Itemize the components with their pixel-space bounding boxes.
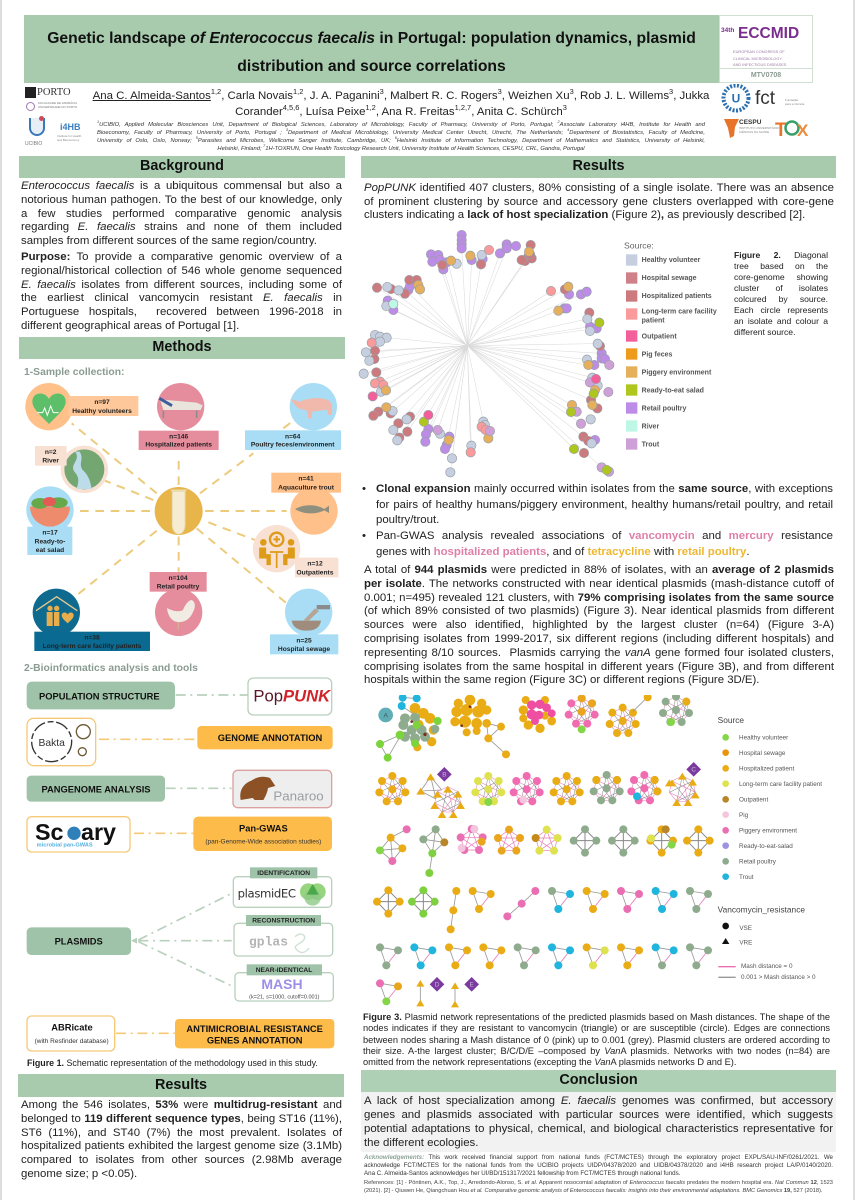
text: plasmids paragraph: 0.001; n=495) revealed 121 clusters, with 79% comprising isolates from the same source bbox=[364, 592, 834, 604]
tool: plasmidEC: IDENTIFICATION bbox=[257, 870, 310, 877]
text: results left: Among the 546 isolates, 53% were multidrug-resistant and bbox=[21, 1099, 342, 1111]
source: river: n=2 bbox=[45, 449, 57, 456]
legend: vancomycin resistance: Vancomycin_resistance bbox=[718, 904, 805, 914]
logo: U emblem: U bbox=[732, 92, 740, 106]
center: test tube bbox=[155, 487, 203, 535]
affiliations: University of Oslo, Oslo, Norway; 5Parasites and Microbes, Wellcome Sanger Institute, Cambridge, UK; 6Helsinki Institute of Information Technology, Department of Mathematics and Statistics, University of Helsinki, bbox=[97, 136, 705, 144]
source: healthy volunteers bbox=[25, 383, 138, 430]
title banner bbox=[24, 15, 719, 83]
legend: source colours: Pig bbox=[739, 812, 749, 819]
text: plasmids paragraph: comprising isolates from the same hospital in different years (Figure 3B), and from different bbox=[364, 661, 834, 673]
source: trout: n=41 bbox=[298, 475, 314, 482]
badges B C D E: D bbox=[435, 982, 440, 989]
logos left: UCIBIO bbox=[25, 141, 42, 147]
logos left: UNIVERSIDADE DO PORTO bbox=[38, 105, 77, 109]
tool: gplas bbox=[234, 915, 333, 956]
source: river: River bbox=[42, 458, 59, 465]
legend: source: Retail poultry bbox=[642, 405, 687, 412]
bullet: pan-GWAS: Pan-GWAS analysis revealed associations of vancomycin and mercury resistance bbox=[376, 530, 833, 542]
logo: CESPU: CIÊNCIAS DA SAÚDE bbox=[739, 129, 769, 134]
text: purpose: the earliest clinical vancomycin resistant E. faecalis in bbox=[21, 292, 342, 304]
text: background: notorious human pathogen. To the best of our knowledge, only bbox=[21, 194, 342, 206]
box: pangenome analysis: PANGENOME ANALYSIS bbox=[41, 784, 151, 794]
text: results left: ST6 (11%), and ST40 (7%) the most prevalent. Isolates of bbox=[21, 1126, 342, 1138]
source: river bbox=[35, 446, 108, 493]
badge A bbox=[378, 708, 393, 722]
bullet: clonal expansion: poultry/trout. bbox=[376, 514, 439, 526]
source: healthy volunteers: Healthy volunteers bbox=[72, 408, 132, 415]
text: purpose: regional/historical collection of 546 whole genome sequenced bbox=[21, 265, 342, 277]
conference logo: ECCMID: ECCMID bbox=[738, 25, 799, 42]
small clusters row 3 bbox=[376, 825, 714, 877]
tool: ABRicate bbox=[27, 1016, 115, 1051]
heading: Methods: Methods bbox=[152, 339, 212, 355]
caption: figure 3: between nodes sharing a Mash distance of 0 (pink) up to 0.001 (grey). Plasmid clusters are ordered according to bbox=[363, 1035, 830, 1045]
box: pan-GWAS: Pan-GWAS bbox=[239, 824, 288, 834]
logo: Scoary: microbial pan-GWAS bbox=[37, 843, 93, 849]
badges B C D E: C bbox=[691, 767, 696, 774]
tool: MASH: (k=21, s=1000, cutoff=0.001) bbox=[249, 994, 320, 1000]
legend: source colours: Healthy volunteer bbox=[739, 735, 788, 742]
authors bbox=[92, 87, 710, 118]
caption: figure 1: Figure 1. Schematic representation of the methodology used in this study. bbox=[27, 1058, 318, 1068]
text: background: regarding E. faecalis strains and none of them included bbox=[21, 221, 342, 233]
text: results left: belonged to 119 different sequence types, being ST16 (11%), bbox=[21, 1113, 342, 1125]
text: purpose: Purpose: To provide a comparative genomic overview of a bbox=[21, 251, 342, 263]
caption: figure 2: different source. bbox=[734, 327, 795, 337]
tool: MASH bbox=[235, 964, 333, 1001]
logo: Scoary: ary bbox=[81, 819, 116, 845]
text: plasmids paragraph: hospitals within the same region (Figure 3C) or different regions (Figure 3D/E). bbox=[364, 674, 759, 686]
cluster 3 bbox=[519, 696, 556, 733]
tool: gplas: RECONSTRUCTION bbox=[252, 918, 315, 925]
legend: source: Ready-to-eat salad bbox=[642, 387, 704, 394]
text: plasmids paragraph: representing 8/10 sources. Plasmids carrying the vanA gene formed four isolated clusters, bbox=[364, 647, 834, 659]
logos left: FACULDADE DE FARMÁCIA bbox=[38, 101, 77, 105]
legend: mash distance: Mash distance = 0 bbox=[741, 963, 793, 970]
source: pig bbox=[245, 383, 341, 450]
text: references bbox=[364, 1180, 833, 1194]
tree nodes bbox=[359, 230, 614, 477]
legend: vancomycin resistance: VRE bbox=[739, 939, 752, 946]
source: pig: n=64 bbox=[285, 433, 301, 440]
legend: source colours bbox=[718, 715, 822, 881]
subheading: sample collection: 1-Sample collection: bbox=[24, 367, 124, 378]
box: AMR annotation: GENES ANNOTATION bbox=[207, 1036, 303, 1046]
conference logo: ECCMID: CLINICAL MICROBIOLOGY bbox=[733, 56, 782, 61]
legend: source colours: Trout bbox=[739, 874, 754, 881]
text: results left bbox=[21, 1099, 342, 1180]
logo: Panaroo: Panaroo bbox=[273, 789, 324, 804]
logo: CESPU bbox=[724, 119, 780, 138]
legend: source colours: Hospitalized patient bbox=[739, 766, 794, 773]
legend: source: patient bbox=[642, 318, 665, 325]
page edge strip right bbox=[853, 0, 855, 1200]
legend: source: Outpatient bbox=[642, 333, 677, 340]
logo: Bakta bbox=[27, 718, 96, 766]
logo: TOX: T bbox=[775, 120, 787, 141]
tree branches bbox=[364, 248, 602, 472]
text: plasmids paragraph: (of which 89% consisted of two plasmids) (Figure 3). Near identical plasmids from different bbox=[364, 605, 834, 617]
text: plasmids paragraph: sources were also identified, highlighted by the largest cluster (n=64) (Figure 3-A) bbox=[364, 619, 834, 631]
source: trout: Aquaculture trout bbox=[278, 484, 335, 491]
text: purpose: different geographical areas of Portugal [1]. bbox=[21, 320, 239, 332]
box: plasmids bbox=[27, 927, 131, 955]
box: plasmids: PLASMIDS bbox=[55, 936, 103, 946]
text: acknowledgements: Ana C. Almeida-Santos acknowledges her UI/BD/151317/2021 fellowship from FCT/MCTES through national funds. bbox=[364, 1170, 680, 1177]
bullet: clonal expansion: for pairs of healthy humans/piggery environment, healthy humans/retail poultry, and retail bbox=[376, 499, 833, 511]
legend: source colours: Hospital sewage bbox=[739, 750, 786, 757]
text: conclusion: potential adaptations to physical, chemical, and biological characteristics representative for bbox=[364, 1123, 833, 1135]
heading: Background bbox=[19, 156, 345, 178]
logos left bbox=[25, 87, 82, 147]
source: hospital sewage: n=25 bbox=[296, 637, 312, 644]
legend: source colours: Long-term care facility patient bbox=[739, 781, 822, 788]
box: pan-GWAS bbox=[193, 817, 332, 851]
legend: source colours: Piggery environment bbox=[739, 828, 797, 835]
affiliations: Helsinki, Finland; 71H-TOXRUN, One Health Toxicology Research Unit, University Institute of Health Sciences, CESPU, CRL, Gandra, Portugal bbox=[217, 144, 585, 152]
heading: Conclusion: Conclusion bbox=[559, 1072, 638, 1088]
conference logo: ECCMID: EUROPEAN CONGRESS OF bbox=[733, 49, 785, 54]
legend: mash distance bbox=[718, 963, 816, 981]
legend: source colours: Source bbox=[718, 715, 744, 725]
box: genome annotation bbox=[197, 726, 333, 749]
logos left: Institute for Health bbox=[57, 134, 81, 138]
conclusion background panel bbox=[361, 1092, 836, 1152]
source: outpatients: Outpatients bbox=[297, 569, 334, 576]
affiliations bbox=[97, 120, 706, 152]
source: retail poultry bbox=[150, 572, 207, 636]
logo: PopPUNK: PopPUNK bbox=[253, 686, 332, 705]
legend: source colours: Outpatient bbox=[739, 797, 768, 804]
subheading: bioinformatics: 2-Bioinformatics analysis and tools bbox=[24, 663, 198, 674]
text: acknowledgements: acknowledge FCT/MCTES for the national funds from the UCIBIO projects UIDP/04378/2020 and UIDB/04378/2020 and i4HB research project LA/P/0140/2020. bbox=[364, 1162, 833, 1169]
heading: Results right: Results bbox=[572, 158, 624, 174]
title banner: distribution and source correlations bbox=[237, 58, 506, 75]
text: background: samples from different sources of the same region/country. bbox=[21, 235, 317, 247]
caption: figure 2: Figure 2. Diagonal bbox=[734, 250, 828, 260]
text: plasmids paragraph: per isolate. The networks constructed with near identical plasmids (mash-distance cutoff of bbox=[364, 578, 834, 590]
source: hospital sewage bbox=[270, 589, 338, 654]
logo: Panaroo bbox=[233, 770, 332, 808]
logo: TOX: X bbox=[797, 121, 809, 140]
caption: figure 3: omitted from the network representations (excepting the VanA plasmids networks D and E). bbox=[363, 1057, 736, 1067]
badges B C D E bbox=[430, 762, 701, 992]
affiliations: 1UCIBIO, Applied Molecular Biosciences Unit, Department of Biological Sciences, Laboratory of Microbiology, Faculty of Pharmacy, University of Porto, Portugal; 2Associate Laboratory i4HB, Institute for Health and bbox=[97, 120, 705, 128]
text: acknowledgements: Acknowledgements: This work received financial support from national funds (FCT/MCTES) through the exploratory project EXPL/SAU-INF/0261/2021. We bbox=[364, 1154, 833, 1161]
caption: figure 2: tree based on the bbox=[734, 261, 828, 271]
legend: source colours: Retail poultry bbox=[739, 859, 777, 866]
source: healthy volunteers: n=97 bbox=[94, 399, 110, 406]
heading: Methods bbox=[19, 337, 345, 359]
source: salad bbox=[26, 486, 74, 555]
text: conclusion: A lack of host specialization among E. faecalis genomes was confirmed, but accessory bbox=[364, 1095, 833, 1107]
bullet: pan-GWAS bbox=[362, 530, 833, 558]
source: hospitalized patients: n=146 bbox=[169, 434, 188, 441]
heading: Conclusion bbox=[361, 1070, 836, 1092]
source: pig: Poultry feces/environment bbox=[251, 442, 335, 449]
logos right bbox=[722, 84, 809, 141]
tool: plasmidEC bbox=[233, 867, 332, 907]
badge A: A bbox=[383, 713, 388, 720]
source: long-term care: Long-term care facility patients bbox=[43, 643, 142, 650]
small clusters row 5 bbox=[376, 943, 712, 969]
badges B C D E: B bbox=[442, 772, 446, 779]
legend: source: Healthy volunteer bbox=[642, 257, 701, 264]
box: AMR annotation bbox=[175, 1019, 334, 1048]
text: references: (2021). [2] - Qiuwen He, Qiangchuan Hou et al. Comparative genomic analysis of Enterococcus faecalis: insights into their environmental adaptations. BMC Genomics 19, 527 (2018). bbox=[364, 1188, 822, 1194]
affiliations: Bioeconomy, Faculty of Pharmacy, University of Porto, Portugal ; 3Department of Medical Microbiology, University Medical Center Utrecht, Utrecht, The Netherlands; 4Department of Biostatistics, Faculty of Medicine, bbox=[97, 128, 705, 136]
heading: Results left bbox=[18, 1074, 344, 1097]
caption: figure 3: their size. A-the largest cluster; B/C/D/E –composed by VanA plasmids. Networks with two nodes (n=84) are bbox=[363, 1046, 830, 1056]
source: retail poultry: n=104 bbox=[168, 575, 188, 582]
authors: Corander4,5,6, Luísa Peixe1,2, Ana R. Freitas1,2,7, Anita C. Schürch3 bbox=[235, 103, 567, 118]
logo: fct: Fundação bbox=[785, 98, 799, 102]
text: results intro: of prominent clustering by source and accessory gene clusters overlapped with core-gene bbox=[364, 196, 834, 208]
cluster 2 bbox=[450, 695, 510, 758]
text: results intro: clusters indicating a lack of host specialization (Figure 2), as previously described [2]. bbox=[364, 209, 805, 221]
logo: fct: fct bbox=[755, 88, 776, 109]
text: conclusion: the different ecologies. bbox=[364, 1137, 478, 1149]
text: background: a few studies performed comparative genomic analysis bbox=[21, 208, 342, 220]
tool: plasmidEC: plasmidEC bbox=[238, 886, 296, 900]
source: long-term care bbox=[33, 589, 150, 651]
legend: source: Trout bbox=[642, 441, 660, 448]
heading: Results left: Results bbox=[155, 1077, 207, 1093]
heading: Background: Background bbox=[140, 158, 224, 174]
ring clusters row 1 bbox=[565, 693, 693, 737]
bullet: clonal expansion: Clonal expansion mainly occurred within isolates from the same source, with exceptions bbox=[376, 483, 833, 495]
legend: source: Pig feces bbox=[642, 351, 673, 358]
tool: MASH: MASH bbox=[261, 976, 303, 992]
box: population structure: POPULATION STRUCTURE bbox=[39, 692, 160, 702]
text: references: References: [1] - Pöntinen, A.K., Top, J., Arredondo-Alonso, S. et al. Apparent nosocomial adaptation of Enterococcus faecalis predates the modern hospital era. Nat Commun 12, 1523 bbox=[364, 1180, 833, 1186]
text: conclusion bbox=[364, 1095, 833, 1149]
box: pan-GWAS: (pan-Genome-Wide association studies) bbox=[205, 838, 321, 845]
legend: vancomycin resistance bbox=[718, 904, 805, 946]
box: pangenome analysis bbox=[27, 776, 165, 802]
caption: figure 2: an isolate and colour a bbox=[734, 316, 828, 326]
text: results left: compared to isolates from other sources (2.98Mb average bbox=[21, 1154, 342, 1166]
small clusters row 6 bbox=[376, 979, 459, 1007]
text: background: Enterococcus faecalis is a ubiquitous commensal but also a bbox=[21, 180, 342, 192]
legend: source bbox=[624, 240, 717, 450]
text: purpose: Portuguese hospitals, recovered between 1996-2018 in bbox=[21, 306, 342, 318]
text: results intro bbox=[364, 182, 834, 221]
logo: Bakta: Bakta bbox=[38, 738, 65, 749]
logo: TOX bbox=[775, 120, 809, 141]
box: genome annotation: GENOME ANNOTATION bbox=[218, 733, 323, 743]
cluster A (largest) bbox=[376, 694, 442, 762]
conference logo: ECCMID bbox=[719, 15, 813, 83]
text: plasmids paragraph bbox=[364, 564, 834, 686]
badges B C D E: E bbox=[470, 982, 474, 989]
legend: source: Hospitalized patients bbox=[642, 293, 712, 300]
authors: Ana C. Almeida-Santos1,2, Carla Novais1,2, J. A. Paganini3, Malbert R. C. Rogers3, Weizhen Xu3, Rob J. L. Willems3, Jukka bbox=[93, 87, 709, 102]
page edge strip left bbox=[0, 0, 2, 1200]
ring clusters row 2 bbox=[375, 771, 700, 818]
text: background bbox=[21, 180, 342, 247]
source: hospitalized patients bbox=[139, 383, 219, 450]
tool: gplas: gplas bbox=[249, 935, 288, 950]
tool: ABRicate: ABRicate bbox=[51, 1023, 93, 1033]
text: results intro: PopPUNK identified 407 clusters, 80% consisting of a single isolate. There was an absence bbox=[364, 182, 834, 194]
box: population structure bbox=[27, 682, 175, 709]
logos left: PORTO bbox=[37, 87, 71, 98]
text: plasmids paragraph: A total of 944 plasmids were predicted in 88% of isolates, with an average of 2 plasmids bbox=[364, 564, 834, 576]
source: outpatients: n=12 bbox=[307, 561, 323, 568]
text: conclusion: genes and plasmids associated with particular sources were identified, which suggests bbox=[364, 1109, 833, 1121]
logo: Scoary: Sc bbox=[35, 819, 64, 845]
source: trout bbox=[271, 473, 341, 535]
legend: source: River bbox=[642, 423, 659, 430]
legend: source colours: Ready-to-eat-salad bbox=[739, 843, 793, 850]
logo: fct bbox=[755, 88, 805, 109]
figure 2: phylogenetic tree bbox=[358, 230, 717, 478]
caption: figure 2: Each circle represents bbox=[734, 305, 828, 315]
figure 1b: bioinformatics tools bbox=[24, 663, 334, 1052]
figure 3: plasmid networks bbox=[372, 695, 822, 1008]
arrowhead: plasmids bbox=[131, 938, 137, 944]
logo: Scoary bbox=[27, 817, 130, 852]
caption: figure 2: core-genome showing bbox=[734, 272, 828, 282]
source: salad: n=17 bbox=[42, 529, 58, 536]
source: hospitalized patients: Hospitalized patients bbox=[145, 442, 212, 449]
bullet: clonal expansion: • bbox=[362, 483, 366, 495]
caption: figure 3: Figure 3. Plasmid network representations of the predicted plasmids based on Mash distances. The shape of the bbox=[363, 1012, 830, 1022]
figure 1a: sample collection bbox=[24, 367, 341, 654]
source: hospital sewage: Hospital sewage bbox=[278, 646, 330, 653]
text: acknowledgements bbox=[364, 1154, 833, 1177]
legend: mash distance: 0.001 > Mash distance > 0 bbox=[741, 974, 816, 981]
small clusters row 4 bbox=[373, 886, 712, 933]
title banner: Genetic landscape of Enterococcus faecalis in Portugal: population dynamics, plasmid bbox=[47, 30, 696, 47]
logos left: and Bioeconomy bbox=[57, 138, 79, 142]
text: purpose: E. faecalis isolates from different sources, including some of bbox=[21, 278, 342, 290]
source: outpatients bbox=[253, 525, 338, 577]
text: results left: genome size; p <0.05). bbox=[21, 1168, 137, 1180]
legend: source: Source: bbox=[624, 240, 654, 250]
source: retail poultry: Retail poultry bbox=[157, 584, 200, 591]
logos left: i4HB bbox=[60, 122, 81, 132]
box: AMR annotation: ANTIMICROBIAL RESISTANCE bbox=[186, 1024, 323, 1034]
source: salad: eat salad bbox=[36, 547, 64, 554]
dashed connectors bbox=[72, 419, 295, 603]
conference logo: ECCMID: AND INFECTIOUS DISEASES bbox=[733, 62, 786, 67]
caption: figure 2: cluster of isolates bbox=[734, 283, 828, 293]
caption: figure 3 bbox=[363, 1012, 830, 1067]
source: long-term care: n=38 bbox=[84, 635, 100, 642]
bullet: pan-GWAS: • bbox=[362, 530, 366, 542]
text: purpose bbox=[21, 251, 342, 332]
legend: source: Hospital sewage bbox=[642, 275, 697, 282]
tool: ABRicate: (with Resfinder database) bbox=[35, 1038, 109, 1045]
caption: figure 2 bbox=[734, 250, 828, 337]
heading: Results right bbox=[361, 156, 836, 178]
source: salad: Ready-to- bbox=[35, 538, 65, 545]
legend: source: Piggery environment bbox=[642, 369, 712, 376]
conference logo: ECCMID: MTV0708 bbox=[751, 72, 781, 79]
text: plasmids paragraph: comprising isolates from 1999-2017, six different regions (including different hospitals) and bbox=[364, 633, 834, 645]
conference logo: ECCMID: 34th bbox=[721, 27, 734, 34]
legend: vancomycin resistance: VSE bbox=[739, 925, 752, 932]
logo: CESPU: CESPU bbox=[739, 119, 762, 126]
logo: CESPU: INSTITUTO UNIVERSITÁRIO bbox=[739, 126, 780, 130]
logo: PopPUNK bbox=[248, 678, 332, 715]
text: results left: hospitalized patients exhibited the largest genome size (3.1Mb) bbox=[21, 1140, 342, 1152]
caption: figure 3: nodes indicates if they are resistant to vancomycin (triangle) or are susceptible (circle). Edges are connections bbox=[363, 1023, 830, 1033]
caption: figure 2: colcured by source. bbox=[734, 294, 828, 304]
tool: MASH: NEAR-IDENTICAL bbox=[256, 967, 312, 974]
legend: source: Long-term care facility bbox=[642, 309, 717, 316]
dashed connectors bbox=[99, 695, 248, 1033]
bullet: pan-GWAS: genes with hospitalized patients, and of tetracycline with retail poultry. bbox=[376, 546, 750, 558]
bullet: clonal expansion bbox=[362, 483, 833, 526]
logo: fct: para a Ciência bbox=[785, 102, 805, 106]
